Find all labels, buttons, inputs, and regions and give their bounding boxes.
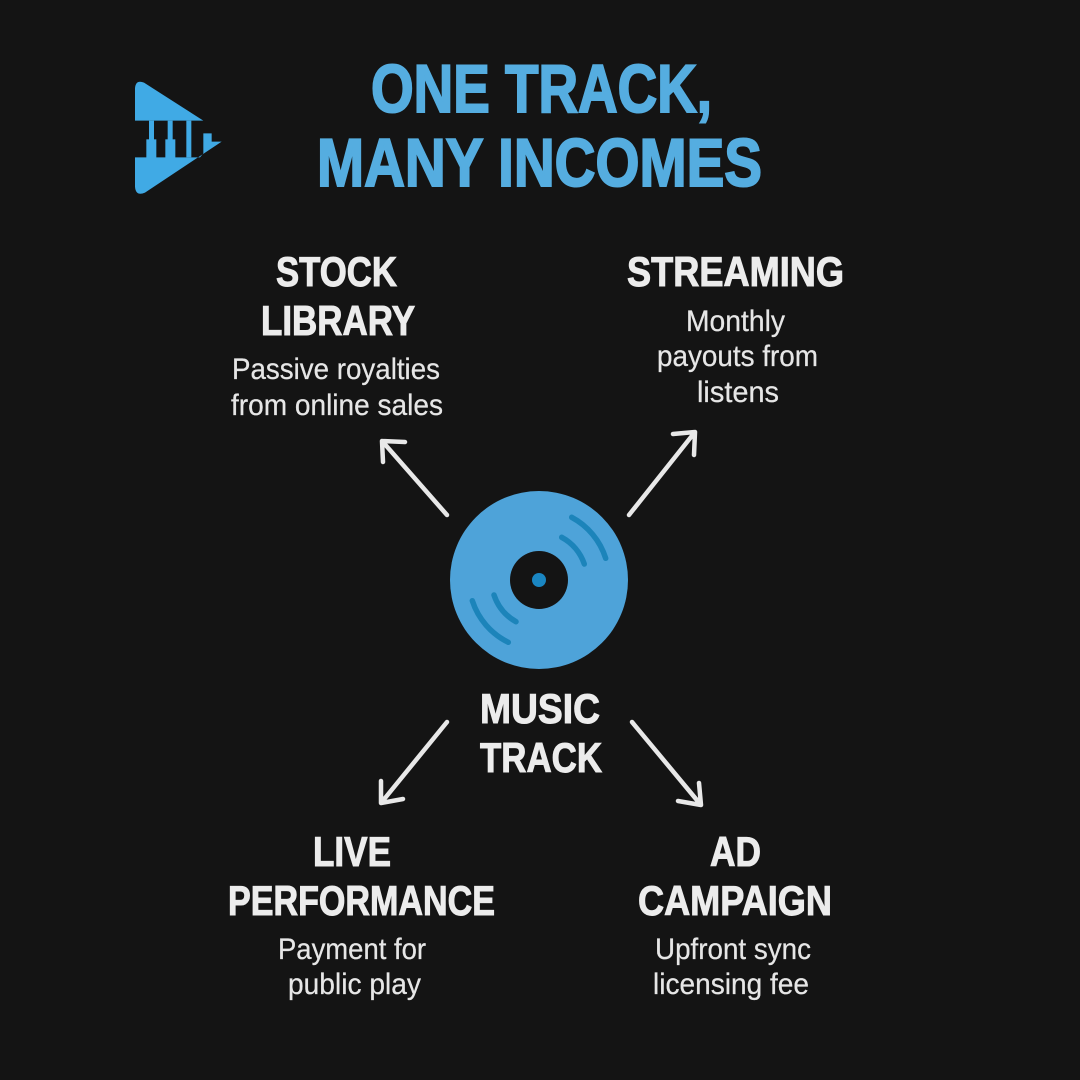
panel: streaming: listens <box>697 376 779 409</box>
panel: streaming: STREAMING <box>627 248 844 295</box>
panel: stock library: STOCK <box>276 248 397 295</box>
panel: live performance <box>228 828 495 1001</box>
panel: stock library: Passive royalties <box>232 353 440 386</box>
title <box>317 51 762 201</box>
icon: play-button piano logo <box>135 82 222 194</box>
panel: live performance: LIVE <box>313 828 391 875</box>
panel: ad campaign: Upfront sync <box>655 933 811 966</box>
arrow: to streaming <box>629 432 695 515</box>
label: music track: TRACK <box>480 734 602 781</box>
panel: live performance: Payment for <box>278 933 426 966</box>
panel: stock library: from online sales <box>231 389 443 422</box>
arrow: to live performance <box>381 722 447 803</box>
panel: ad campaign: AD <box>710 828 761 875</box>
label: music track <box>480 685 602 781</box>
panel: stock library <box>231 248 443 422</box>
title: MANY INCOMES <box>317 125 762 201</box>
icon: vinyl record <box>450 491 628 669</box>
panel: streaming <box>627 248 844 409</box>
panel: live performance: PERFORMANCE <box>228 877 495 924</box>
panel: streaming: payouts from <box>657 340 818 373</box>
panel: stock library: LIBRARY <box>261 297 415 344</box>
arrow: to stock library <box>382 441 447 515</box>
arrow: to ad campaign <box>632 722 701 805</box>
label: music track: MUSIC <box>480 685 600 732</box>
panel: live performance: public play <box>288 968 421 1001</box>
panel: ad campaign: licensing fee <box>653 968 809 1001</box>
title: ONE TRACK, <box>371 51 712 127</box>
panel: ad campaign: CAMPAIGN <box>638 877 832 924</box>
panel: streaming: Monthly <box>686 305 785 338</box>
panel: ad campaign <box>638 828 832 1001</box>
